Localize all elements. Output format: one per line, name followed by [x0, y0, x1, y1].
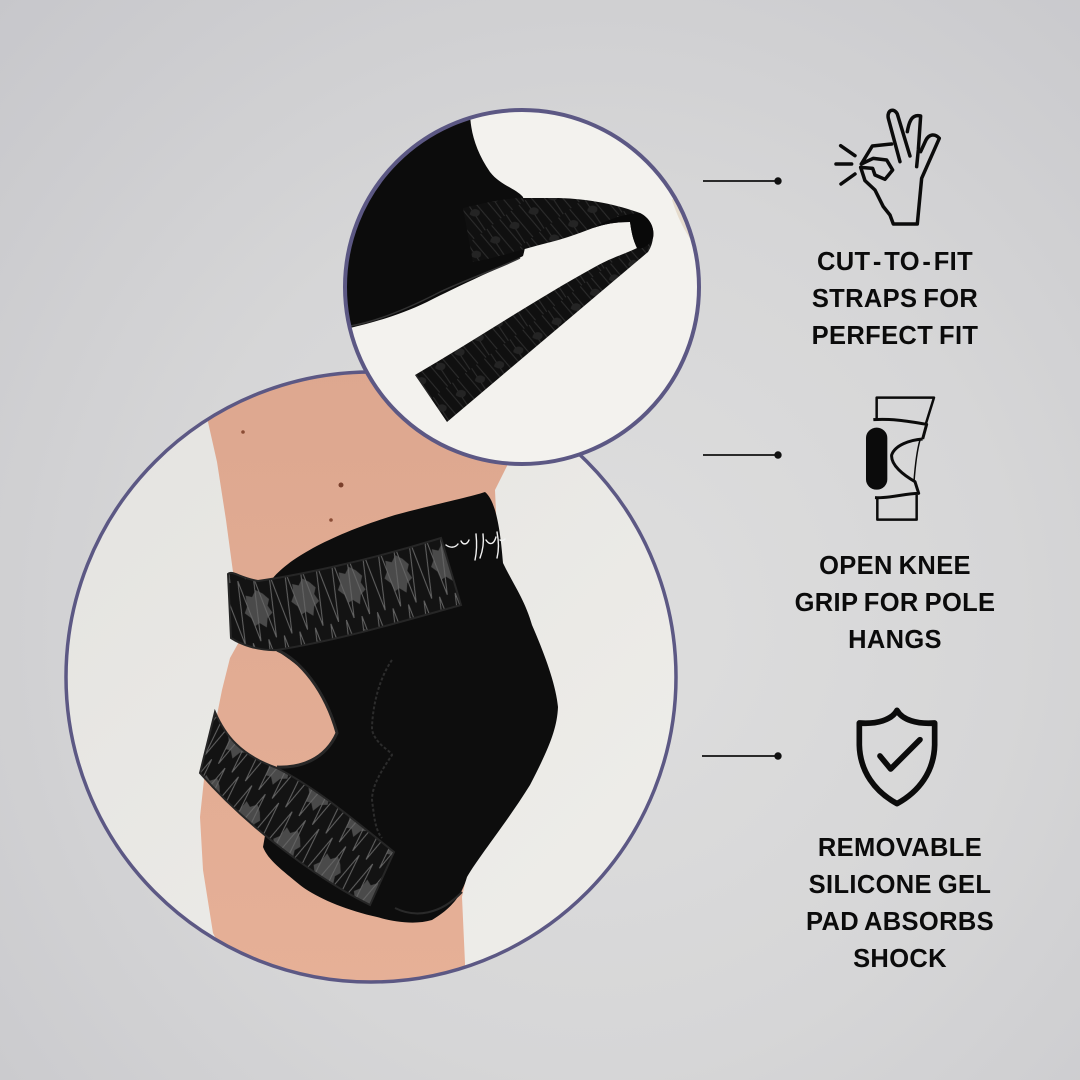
text: cut-to-fit straps	[812, 248, 978, 350]
knee pad body	[263, 492, 558, 923]
strap loop	[415, 198, 653, 422]
black pad section	[347, 120, 525, 328]
text: cut-to-fit straps: CUT-TO-FIT	[817, 248, 973, 276]
text: removable gel pad: REMOVABLE	[818, 834, 982, 862]
text: open knee grip: HANGS	[848, 626, 942, 654]
text: cut-to-fit straps: STRAPS FOR	[812, 285, 978, 313]
icon: ok hand gesture	[836, 110, 939, 224]
strap inner lining	[593, 213, 653, 248]
text: open knee grip: OPEN KNEE	[819, 552, 971, 580]
main illustration	[64, 108, 942, 984]
text: removable gel pad: PAD ABSORBS	[806, 908, 994, 936]
icon: shield with check	[859, 710, 935, 804]
panel: large knee pad photo circle	[66, 350, 676, 1000]
text: open knee grip	[795, 552, 995, 654]
text: cut-to-fit straps: PERFECT FIT	[812, 322, 978, 350]
beige shadow at right edge	[672, 198, 690, 239]
panel: strap detail circle	[330, 100, 705, 464]
pad seam	[372, 660, 392, 838]
pad underside highlight	[395, 892, 462, 913]
connector line 2	[703, 451, 782, 459]
text: open knee grip: GRIP FOR POLE	[795, 589, 995, 617]
connector line 1	[703, 177, 782, 185]
embroidered logo	[446, 532, 505, 560]
upper strap	[228, 538, 461, 650]
lower strap	[200, 712, 394, 905]
icon: knee pad outline	[866, 398, 934, 520]
text: removable gel pad: SHOCK	[853, 945, 947, 973]
text: removable gel pad	[806, 834, 994, 973]
connector line 3	[702, 752, 782, 760]
hole binding	[277, 650, 337, 767]
text: removable gel pad: SILICONE GEL	[809, 871, 991, 899]
leg	[200, 374, 508, 980]
